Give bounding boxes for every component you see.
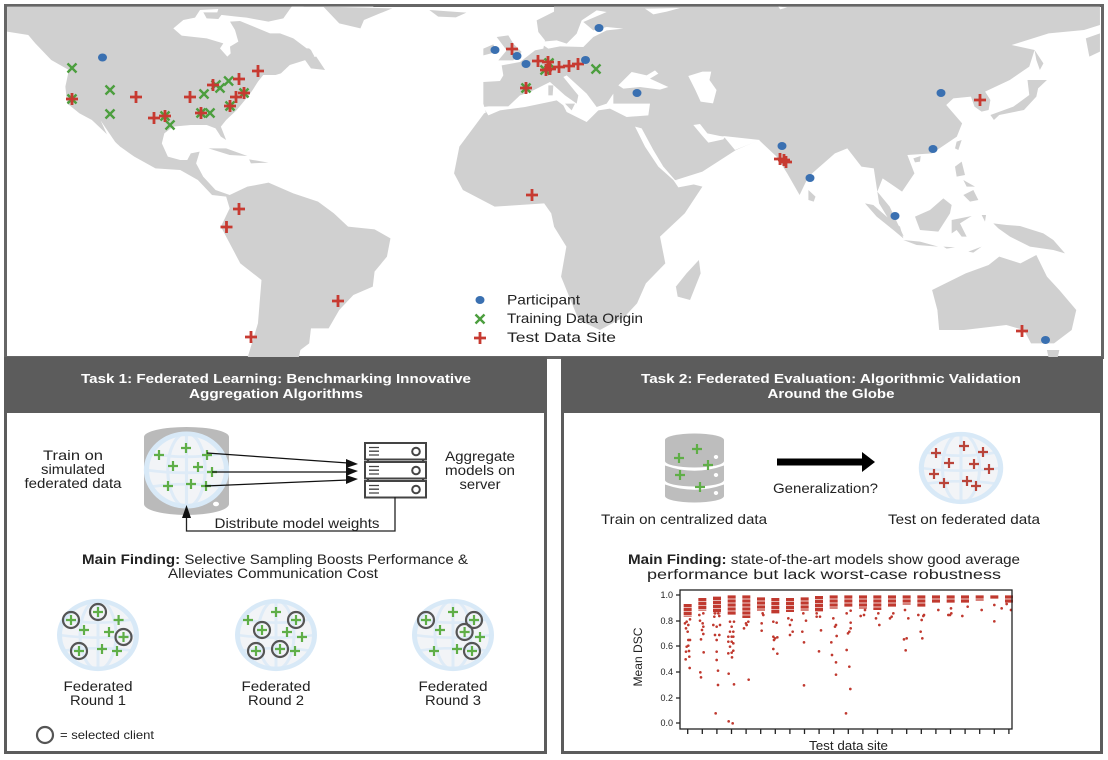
arrow: distribute model weights bbox=[182, 497, 395, 531]
federated round 1 bbox=[58, 600, 138, 708]
aggregate models label: Aggregate bbox=[445, 448, 515, 464]
y axis title: Mean DSC bbox=[631, 627, 645, 686]
arrows to server bbox=[205, 453, 358, 486]
chart axes bbox=[676, 590, 1012, 734]
test on federated data label: Test on federated data bbox=[888, 511, 1040, 527]
y axis tick labels bbox=[660, 590, 673, 728]
map legend bbox=[474, 292, 643, 345]
map panel bbox=[6, 6, 1102, 358]
task 2 header: Task 2: Federated Evaluation: Algorithmic Validation bbox=[641, 371, 1021, 386]
train on simulated federated data label: Train on bbox=[43, 447, 103, 463]
y axis tick labels: 0.2 bbox=[660, 693, 673, 703]
federated round 3 bbox=[413, 600, 493, 708]
map legend: Test Data Site bbox=[507, 329, 616, 345]
y axis tick labels: 1.0 bbox=[660, 590, 673, 600]
task 1 header bbox=[4, 357, 547, 413]
train on centralized data label: Train on centralized data bbox=[601, 511, 767, 527]
icon: database with globe bbox=[144, 427, 229, 515]
federated round 2: Federated bbox=[242, 678, 310, 694]
y axis tick labels: 0.4 bbox=[660, 667, 673, 677]
main finding task 2: Main Finding: state-of-the-art models show good average bbox=[628, 551, 1020, 567]
train on simulated federated data label: simulated bbox=[41, 461, 105, 477]
train on simulated federated data label: federated data bbox=[24, 475, 122, 491]
test data site markers bbox=[66, 43, 1028, 343]
icon: globe with test sites bbox=[920, 433, 1002, 503]
participant markers bbox=[98, 24, 1050, 344]
aggregate models label: models on bbox=[445, 462, 515, 478]
aggregate models label: server bbox=[460, 476, 501, 492]
federated round 1: Federated bbox=[64, 678, 132, 694]
main finding task 1: Main Finding: Selective Sampling Boosts Performance & bbox=[82, 551, 469, 567]
world land masses bbox=[7, 7, 1100, 358]
federated round 2 bbox=[236, 600, 316, 708]
panel: task 2 bbox=[561, 357, 1103, 753]
main finding task 2: performance but lack worst-case robustness bbox=[647, 567, 1001, 582]
federated round 1: Round 1 bbox=[70, 692, 126, 708]
main finding task 2 bbox=[628, 551, 1020, 582]
y axis tick labels: 0.0 bbox=[660, 718, 673, 728]
map legend: Participant bbox=[507, 292, 580, 308]
arrow: distribute model weights: Distribute model weights bbox=[214, 515, 380, 531]
task 1 header: Task 1: Federated Learning: Benchmarking Innovative bbox=[81, 371, 471, 386]
icon: centralized database bbox=[665, 434, 724, 502]
x axis title: Test data site bbox=[809, 739, 888, 753]
chart points bbox=[685, 595, 1011, 723]
arrow: generalization bbox=[773, 452, 878, 496]
y axis tick labels: 0.6 bbox=[660, 641, 673, 651]
selected client legend: = selected client bbox=[60, 728, 155, 742]
federated round 2: Round 2 bbox=[248, 692, 304, 708]
task 2 header: Around the Globe bbox=[768, 386, 894, 401]
main finding task 1: Alleviates Communication Cost bbox=[168, 565, 378, 581]
federated round 3: Federated bbox=[418, 678, 488, 694]
main finding task 1 bbox=[82, 551, 469, 581]
panel: task 1 bbox=[4, 357, 547, 752]
selected client legend bbox=[37, 727, 155, 743]
aggregate models label bbox=[445, 448, 515, 492]
icon: server bbox=[365, 443, 426, 498]
task 1 header: Aggregation Algorithms bbox=[189, 386, 363, 401]
train on simulated federated data label bbox=[24, 447, 122, 491]
training data origin markers bbox=[68, 58, 600, 130]
arrow: generalization: Generalization? bbox=[773, 480, 878, 496]
task 2 header bbox=[561, 357, 1103, 413]
chart: mean DSC by test data site bbox=[631, 590, 1012, 753]
map legend: Training Data Origin bbox=[507, 310, 643, 326]
federated round 3: Round 3 bbox=[425, 692, 481, 708]
y axis tick labels: 0.8 bbox=[660, 616, 673, 626]
